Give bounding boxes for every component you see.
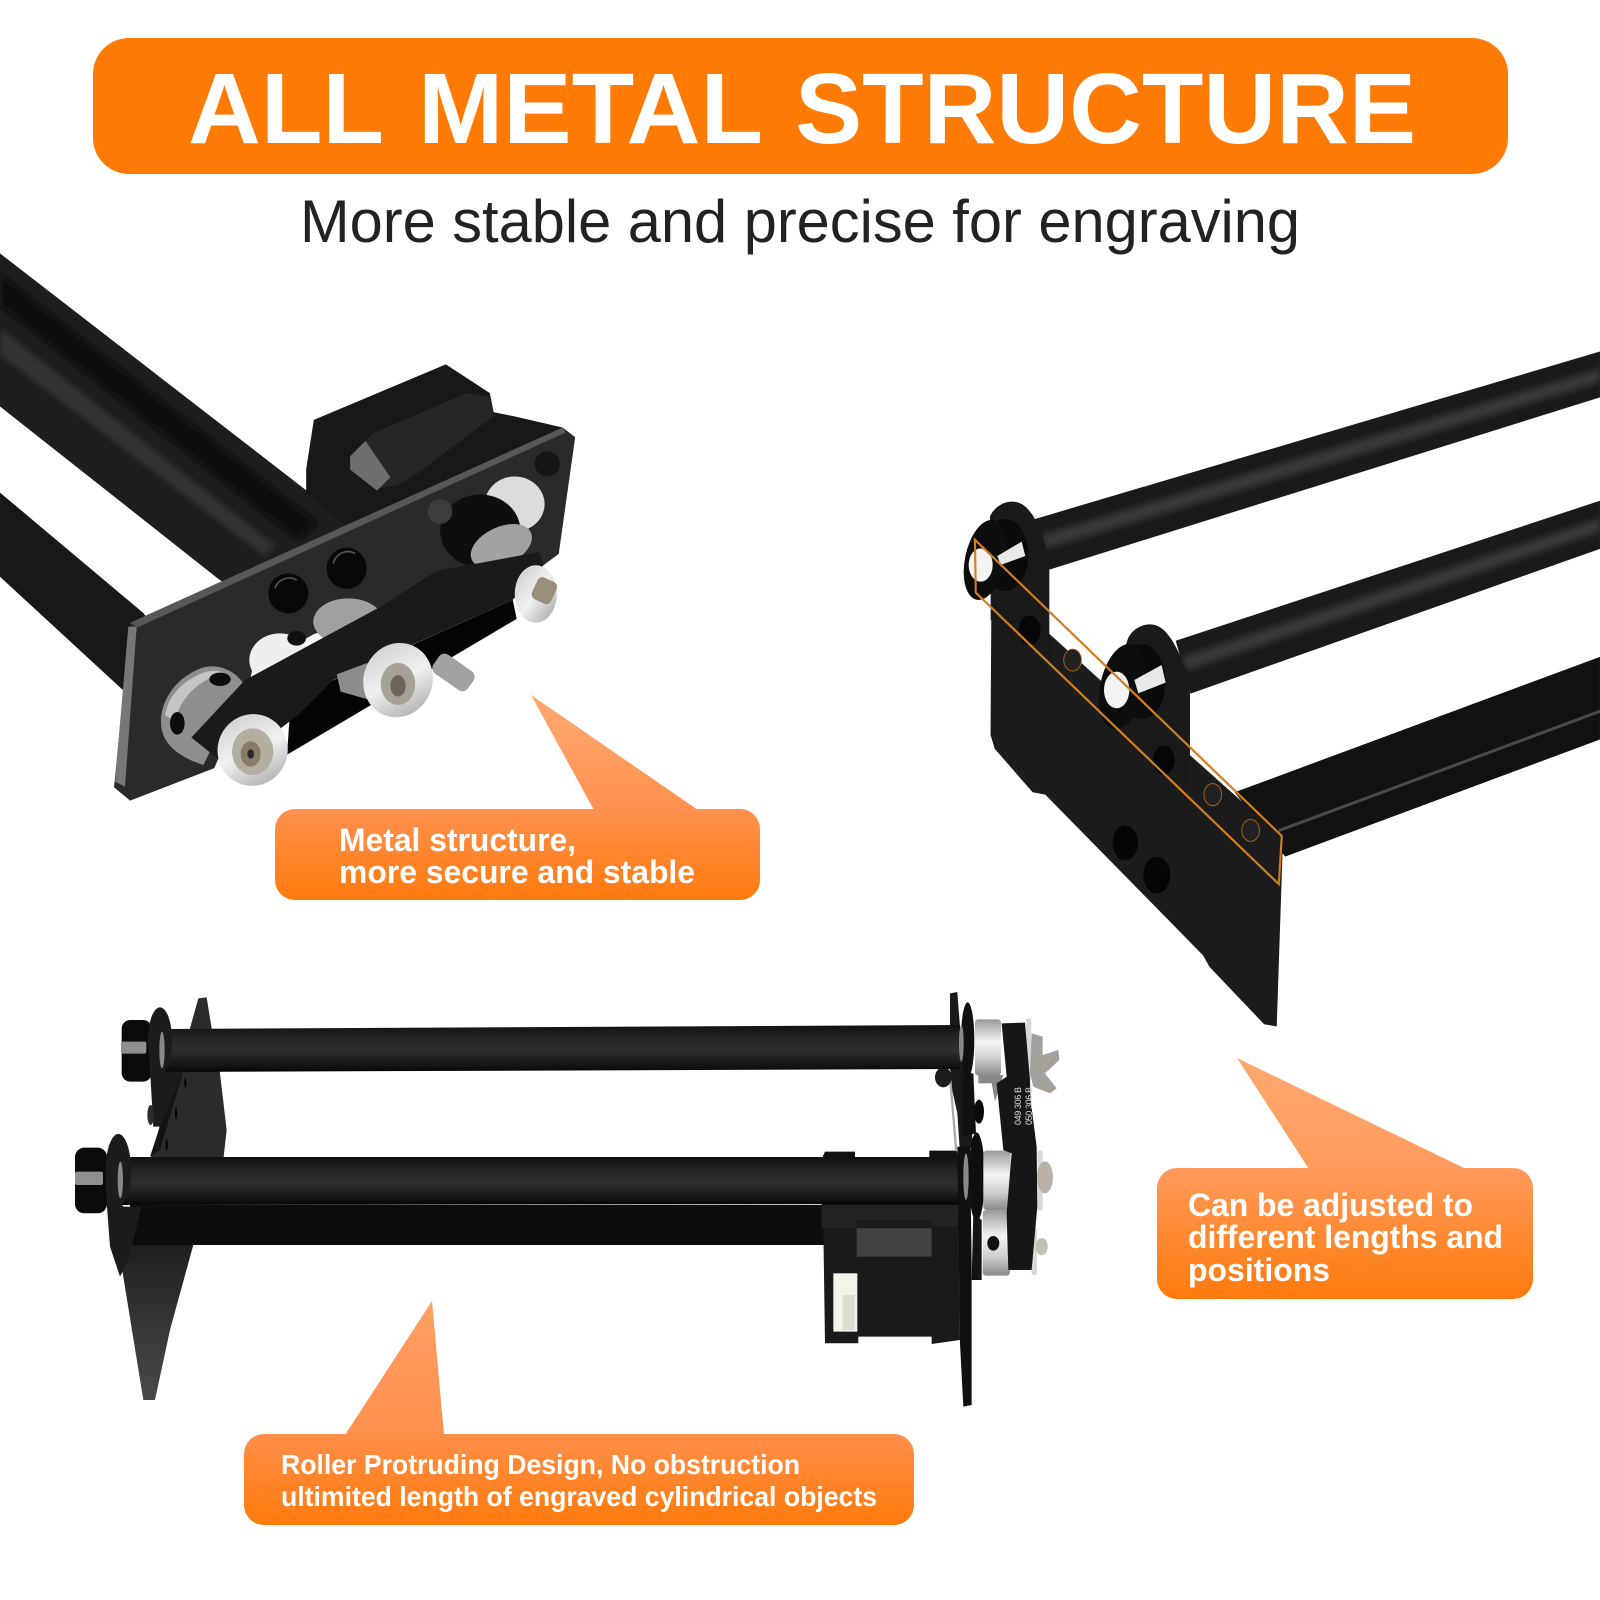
orange highlight outline (975, 540, 1282, 884)
upright 2 (1113, 624, 1190, 790)
lower collar and disc (75, 1148, 107, 1213)
callout: roller protruding (244, 1301, 914, 1525)
belt (997, 1023, 1037, 1270)
callout: adjustable: different lengths and (1188, 1219, 1503, 1255)
callout: adjustable: positions (1188, 1252, 1330, 1288)
small pulley (515, 565, 557, 623)
product photo: angled view with orange outline (957, 351, 1600, 1027)
lower rail (130, 1205, 830, 1245)
subtitle: More stable and precise for engraving (300, 188, 1300, 255)
collar 2 (1118, 644, 1166, 719)
callout: roller protruding: ultimited length of engraved cylindrical objects (281, 1481, 877, 1512)
front pulley (207, 704, 298, 796)
left edge highlight (115, 627, 137, 787)
left back plate (150, 997, 227, 1160)
title banner: ALL (188, 53, 384, 165)
belt print: 049 306 B (1013, 1087, 1023, 1125)
screws (1019, 616, 1041, 645)
callout: metal structure: Metal structure, (339, 822, 576, 858)
callout: adjustable (1157, 1058, 1533, 1299)
title banner: STRUCTURE (795, 53, 1416, 165)
product photo: front view of rotary roller (75, 992, 1059, 1407)
wing nut and bolts (1030, 1033, 1059, 1093)
belt print: 050 306 B (1024, 1087, 1034, 1125)
upright 1 (990, 502, 1049, 665)
lower disc and right plate (969, 1132, 985, 1221)
belt print (1013, 1087, 1034, 1125)
title banner: METAL (418, 53, 763, 165)
top pulley (485, 477, 545, 532)
rear bolt (430, 651, 477, 694)
collar 1 (982, 519, 1028, 591)
middle pulley (353, 633, 443, 727)
product photo: close-up of belt end (0, 253, 575, 801)
collar (161, 666, 243, 765)
motor (822, 1151, 958, 1207)
rods (163, 1025, 960, 1072)
callout: roller protruding: Roller Protruding Design, No obstruction (281, 1449, 800, 1480)
silver pulleys (975, 1019, 1001, 1075)
title banner (93, 38, 1508, 174)
rods (1035, 351, 1600, 570)
lower left plate (122, 1207, 193, 1400)
callout: metal structure: more secure and stable (339, 854, 695, 890)
plate (991, 611, 1283, 1027)
callout: adjustable: Can be adjusted to (1188, 1187, 1473, 1223)
callout: metal structure (275, 695, 760, 900)
thin back plate (950, 992, 973, 1153)
rear discs (1026, 1018, 1031, 1080)
socket screws (268, 573, 308, 613)
belt (287, 600, 517, 755)
upper collar and disc (122, 1020, 152, 1082)
white opening and inner pulley (249, 633, 311, 687)
